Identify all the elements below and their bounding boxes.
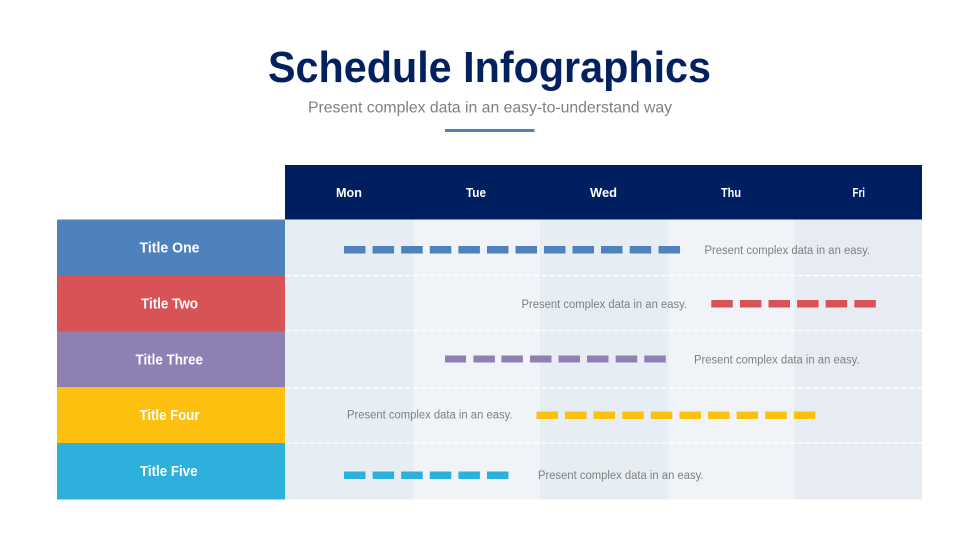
header bar: weekdays (285, 165, 922, 220)
row four description: Present complex data in an easy. (347, 410, 512, 422)
row four: Title Four (57, 387, 815, 443)
row five dashes (344, 472, 508, 479)
row three: Title Three: Title Three (136, 352, 203, 368)
row three dashes (445, 356, 666, 362)
row three: Title Three (57, 332, 860, 387)
row two dashes (711, 300, 876, 308)
day: Wed: Wed (590, 185, 617, 200)
row five: Title Five (57, 443, 704, 500)
accent underline (445, 129, 534, 132)
day: Fri: Fri (852, 185, 865, 200)
row five: Title Five: Title Five (140, 463, 198, 480)
row two description: Present complex data in an easy. (522, 299, 687, 311)
row two: Title Two: Title Two (141, 296, 198, 312)
row four: Title Four: Title Four (140, 407, 200, 424)
row one dashes (344, 246, 680, 254)
row one description: Present complex data in an easy. (704, 245, 870, 257)
row one: Title One: Title One (140, 240, 200, 256)
day: Tue: Tue (466, 185, 486, 200)
row five description: Present complex data in an easy. (538, 470, 704, 482)
row three description: Present complex data in an easy. (694, 354, 860, 366)
title: Schedule Infographics (268, 43, 711, 92)
schedule grid background (285, 219, 922, 500)
day: Mon: Mon (336, 185, 362, 200)
row two: Title Two (57, 276, 876, 332)
subtitle: Present complex data in an easy-to-understand way (308, 100, 672, 116)
row one: Title One (57, 220, 870, 276)
row four dashes (536, 412, 815, 419)
day: Thu: Thu (721, 185, 741, 200)
